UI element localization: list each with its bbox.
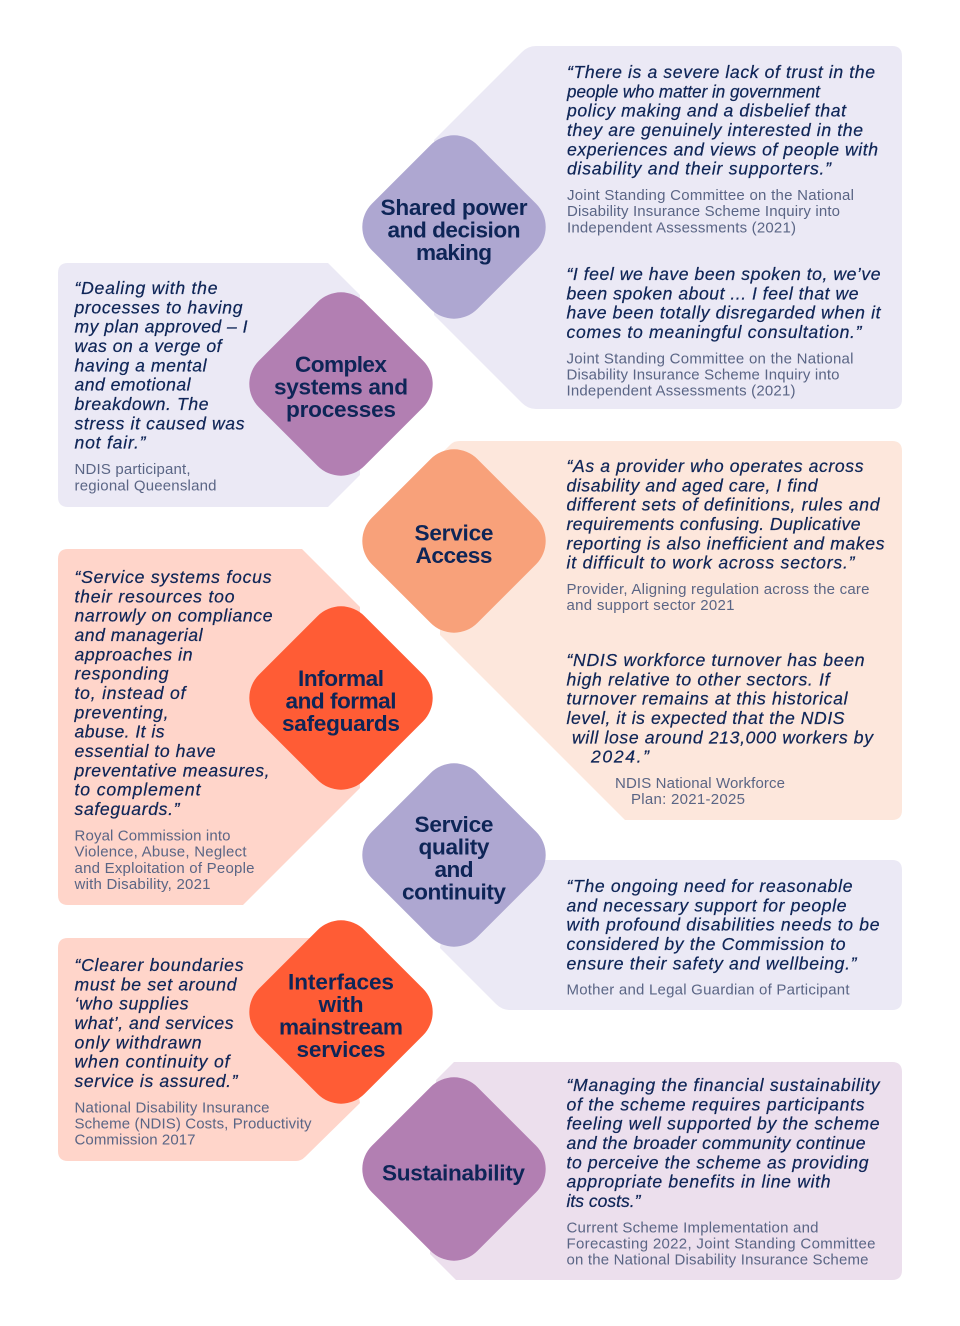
source: National Disability Insurance	[74, 1099, 270, 1116]
quote: considered by the Commission to	[566, 934, 846, 954]
quote: was on a verge of	[74, 336, 224, 356]
source 2	[615, 775, 785, 808]
quote: with profound disabilities needs to be	[566, 915, 880, 935]
quote: their resources too	[74, 586, 235, 606]
diamond: interfaces: services	[296, 1037, 386, 1062]
quote: and the broader community continue	[566, 1133, 866, 1153]
diamond: service access: Service	[414, 520, 494, 546]
quote 2: “I feel we have been spoken to, we’ve	[566, 264, 881, 284]
quote: my plan approved – I	[74, 317, 248, 337]
quote 1: disability and aged care, I find	[566, 475, 819, 495]
diamond: shared power: Shared power	[380, 195, 528, 220]
quote: only withdrawn	[74, 1032, 202, 1052]
quote	[74, 955, 244, 1091]
quote: service is assured.”	[74, 1071, 239, 1091]
source: on the National Disability Insurance Scheme	[566, 1252, 868, 1269]
diamond: complex systems: systems and	[274, 374, 408, 400]
source 2	[566, 350, 854, 400]
diamond: complex systems	[236, 279, 446, 489]
quote 2	[566, 650, 874, 767]
source	[566, 1219, 876, 1269]
source: with Disability, 2021	[74, 876, 210, 893]
quote 1: requirements confusing. Duplicative	[566, 514, 861, 534]
quote 1	[566, 62, 878, 179]
diamond: service quality: continuity	[402, 880, 506, 904]
quote 2: “NDIS workforce turnover has been	[566, 650, 864, 670]
panel: complex systems and processes	[58, 263, 446, 507]
quote	[74, 567, 273, 819]
quote 1	[566, 456, 885, 573]
quote: narrowly on compliance	[74, 606, 273, 626]
quote: and managerial	[74, 625, 204, 645]
diamond: interfaces: mainstream	[279, 1014, 403, 1040]
quote	[566, 1075, 881, 1211]
quote 2: turnover remains at this historical	[566, 689, 849, 709]
diamond: complex systems: Complex	[295, 352, 387, 377]
panel: shared power and decision making	[349, 46, 902, 409]
quote: must be set around	[74, 974, 238, 994]
quote: “Clearer boundaries	[74, 955, 244, 975]
source 2: Disability Insurance Scheme Inquiry into	[566, 366, 840, 384]
diamond: service quality: and	[434, 857, 474, 882]
source: regional Queensland	[74, 477, 216, 494]
quote: when continuity of	[74, 1052, 232, 1072]
quote: preventative measures,	[74, 760, 270, 780]
diamond: service quality: Service	[414, 812, 494, 837]
quote: processes to having	[74, 297, 243, 317]
source 1: Disability Insurance Scheme Inquiry into	[567, 203, 840, 220]
quote: what’, and services	[74, 1013, 234, 1033]
panel: interfaces with mainstream services	[58, 907, 446, 1161]
quote: “Managing the financial sustainability	[566, 1075, 881, 1095]
diamond: shared power: and decision	[388, 218, 520, 242]
diamond: sustainability	[349, 1064, 559, 1274]
quote: having a mental	[74, 355, 208, 375]
source	[74, 1099, 312, 1149]
source: Forecasting 2022, Joint Standing Committee	[566, 1236, 876, 1252]
quote 1: it difficult to work across sectors.”	[566, 553, 856, 573]
quote: and emotional	[74, 375, 192, 395]
source	[74, 828, 254, 893]
quote: not fair.”	[74, 433, 147, 453]
source: Mother and Legal Guardian of Participant	[566, 982, 850, 998]
source 2: Independent Assessments (2021)	[566, 383, 796, 400]
diamond: safeguards: and formal	[286, 688, 396, 714]
quote 1: policy making and a disbelief that	[566, 101, 847, 121]
quote 1: different sets of definitions, rules and	[566, 495, 881, 515]
quote: “Service systems focus	[74, 567, 272, 587]
diamond: safeguards: safeguards	[282, 711, 400, 736]
diamond: sustainability: Sustainability	[382, 1160, 525, 1186]
quote: appropriate benefits in line with	[566, 1172, 830, 1192]
source 1: Joint Standing Committee on the National	[567, 187, 854, 204]
diamond: shared power: making	[416, 240, 492, 265]
diamond: service access: Access	[416, 543, 492, 568]
quote 1: they are genuinely interested in the	[567, 120, 863, 140]
source 1	[566, 581, 870, 614]
quote: responding	[74, 664, 169, 684]
diamond: service quality	[349, 750, 559, 960]
quote: ensure their safety and wellbeing.”	[566, 953, 858, 973]
quote: feeling well supported by the scheme	[566, 1114, 880, 1134]
diamond: interfaces: Interfaces	[288, 970, 394, 994]
source: Commission 2017	[74, 1132, 196, 1149]
quote: breakdown. The	[74, 394, 209, 414]
quote: abuse. It is	[74, 722, 165, 742]
quote 2: 2024.”	[590, 747, 650, 767]
quote	[74, 278, 248, 453]
quote: ‘who supplies	[74, 994, 189, 1014]
source	[74, 461, 216, 494]
quote: approaches in	[74, 644, 192, 664]
quote 2: been spoken about ... I feel that we	[566, 283, 859, 303]
quote: to complement	[74, 780, 202, 800]
quote 1: people who matter in government	[566, 81, 821, 101]
quote 1: reporting is also inefficient and makes	[566, 533, 885, 553]
source: Current Scheme Implementation and	[566, 1219, 818, 1236]
quote: its costs.”	[566, 1191, 642, 1211]
panel: sustainability	[349, 1062, 902, 1280]
quote: of the scheme requires participants	[566, 1094, 865, 1114]
source: and Exploitation of People	[74, 860, 254, 877]
quote: “The ongoing need for reasonable	[566, 876, 853, 896]
quote: stress it caused was	[74, 413, 245, 433]
quote: essential to have	[74, 741, 216, 761]
quote 2: high relative to other sectors. If	[566, 669, 832, 689]
diamond: service access	[349, 436, 559, 646]
quote 1: disability and their supporters.”	[567, 159, 832, 179]
diamond: shared power	[349, 122, 559, 332]
panel: informal and formal safeguards	[58, 549, 446, 905]
quote: to perceive the scheme as providing	[566, 1152, 869, 1172]
source: Scheme (NDIS) Costs, Productivity	[74, 1116, 312, 1132]
quote: safeguards.”	[74, 799, 181, 819]
quote 2: will lose around 213,000 workers by	[572, 727, 874, 747]
quote 2: comes to meaningful consultation.”	[566, 322, 863, 342]
quote 2: have been totally disregarded when it	[566, 303, 882, 323]
diamond: safeguards	[236, 593, 446, 803]
source 1: Independent Assessments (2021)	[567, 219, 796, 236]
panel: service quality and continuity	[349, 750, 902, 1010]
diamond: safeguards: Informal	[298, 666, 384, 691]
source 1: Provider, Aligning regulation across the care	[566, 581, 870, 598]
diamond: interfaces	[236, 907, 446, 1117]
source: Royal Commission into	[74, 828, 230, 844]
source 2: NDIS National Workforce	[615, 775, 785, 792]
quote 1: experiences and views of people with	[567, 139, 878, 159]
quote 2	[566, 264, 882, 342]
quote 1: “There is a severe lack of trust in the	[567, 62, 875, 82]
source 2: Joint Standing Committee on the National	[566, 350, 854, 367]
diamond: complex systems: processes	[286, 397, 396, 422]
quote 1: “As a provider who operates across	[566, 456, 864, 476]
diamond: interfaces: with	[318, 992, 364, 1017]
source 1	[567, 187, 854, 236]
quote	[566, 876, 880, 973]
quote: and necessary support for people	[566, 895, 847, 915]
source 2: Plan: 2021-2025	[631, 791, 745, 808]
panel: service access	[349, 436, 902, 820]
quote: “Dealing with the	[74, 278, 218, 298]
source 1: and support sector 2021	[566, 597, 734, 614]
source: NDIS participant,	[74, 461, 190, 478]
quote 2: level, it is expected that the NDIS	[566, 708, 845, 728]
diamond: service quality: quality	[418, 834, 490, 860]
quote: to, instead of	[74, 683, 188, 703]
source: Violence, Abuse, Neglect	[74, 844, 247, 861]
quote: preventing,	[74, 702, 168, 722]
